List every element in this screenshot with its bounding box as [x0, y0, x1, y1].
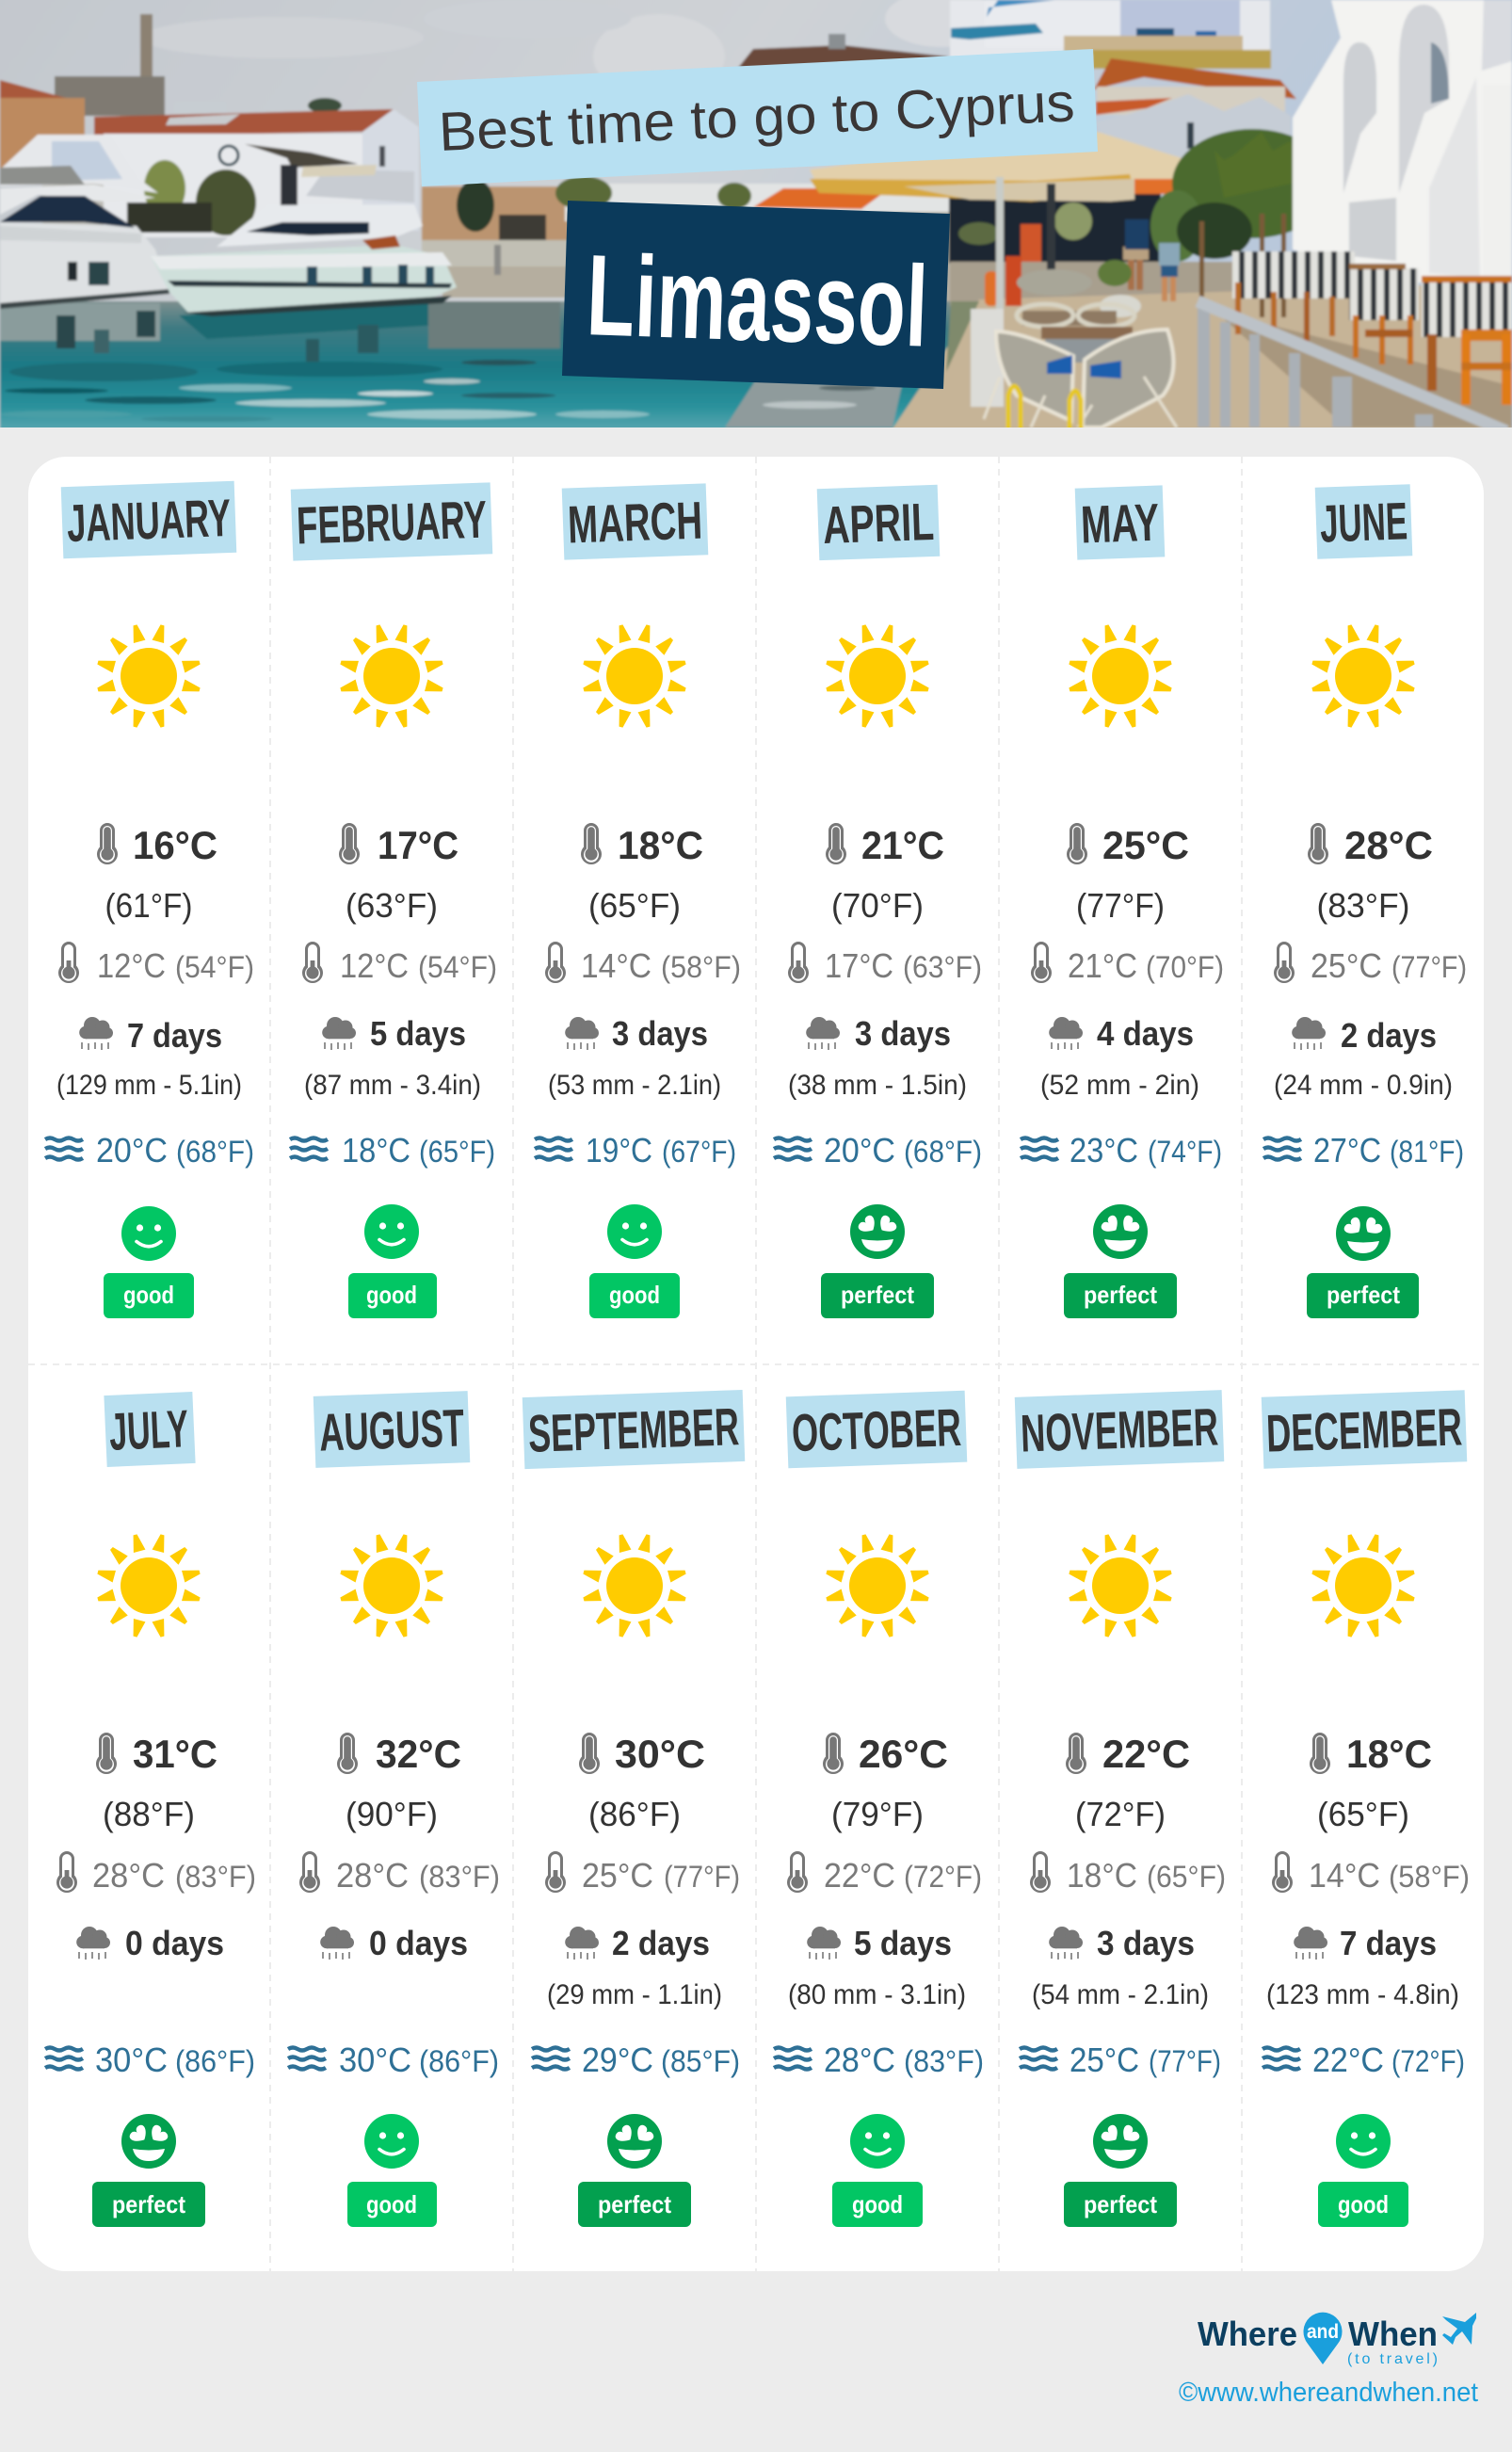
- month heading: May: [1075, 485, 1165, 560]
- rainy days: 0 days: [369, 1924, 468, 1962]
- low temperature: (77°F): [664, 1860, 740, 1894]
- high temperature: 18°C: [618, 823, 703, 867]
- sea temperature: (86°F): [175, 2044, 255, 2078]
- low temperature: [58, 942, 254, 985]
- low temperature: (65°F): [1147, 1860, 1226, 1894]
- month heading: April: APRIL: [822, 492, 935, 555]
- logo: Where and When (to travel): Where: [1198, 2315, 1297, 2353]
- sea temperature: [45, 2041, 255, 2079]
- rating: good: good: [609, 1281, 660, 1309]
- rainfall amount: (123 mm - 4.8in): [1266, 1979, 1459, 2010]
- month heading: October: OCTOBER: [791, 1397, 962, 1462]
- low temperature: 17°C: [825, 946, 893, 985]
- rainfall amount: (53 mm - 2.1in): [548, 1070, 721, 1101]
- rating: perfect: perfect: [1084, 1281, 1157, 1309]
- low temperature: [1031, 942, 1224, 985]
- low temperature: (58°F): [661, 950, 741, 984]
- icon: sun: [1311, 1533, 1416, 1638]
- low temperature: [302, 942, 497, 985]
- sea temperature: [288, 2041, 499, 2079]
- rating: good: good: [123, 1281, 174, 1309]
- month heading: February: [291, 482, 492, 561]
- high temperature Fahrenheit: (63°F): [346, 886, 438, 925]
- rainy days: [76, 1924, 224, 1962]
- month heading: November: [1015, 1390, 1224, 1469]
- rainy days: 0 days: [125, 1924, 224, 1962]
- icon: map pin with "and": and: [1307, 2321, 1339, 2343]
- rainy days: 3 days: [612, 1014, 708, 1053]
- rainfall amount: (29 mm - 1.1in): [547, 1979, 722, 2010]
- rainy days: [1294, 1924, 1437, 1962]
- panel: monthly climate table: [28, 457, 1484, 2271]
- rating: perfect: [1307, 1206, 1419, 1318]
- sea temperature: (86°F): [419, 2044, 499, 2078]
- sea temperature: 30°C: [95, 2041, 168, 2079]
- rating: perfect: perfect: [598, 2190, 671, 2218]
- low temperature: (70°F): [1146, 950, 1224, 984]
- high temperature: 17°C: [378, 823, 458, 867]
- rating: good: good: [366, 1281, 417, 1309]
- column: September: [523, 1390, 745, 2227]
- icon: sun: [96, 623, 201, 729]
- low temperature: 12°C: [97, 946, 166, 985]
- sea temperature: (83°F): [904, 2044, 984, 2078]
- low temperature: 12°C: [340, 946, 409, 985]
- icon: sun: [1068, 623, 1173, 729]
- high temperature: 25°C: [1102, 823, 1189, 867]
- low temperature: 21°C: [1068, 946, 1137, 985]
- month heading: April: [817, 485, 940, 560]
- column: June: [1263, 484, 1467, 1318]
- low temperature: (54°F): [418, 950, 497, 984]
- column: May: [1021, 485, 1224, 1318]
- rating: good: [347, 2114, 437, 2227]
- icon: sun: [1068, 1533, 1173, 1638]
- rating: perfect: [1064, 2114, 1177, 2227]
- sea temperature: 19°C: [586, 1131, 652, 1170]
- rainy days: 5 days: [370, 1014, 466, 1053]
- title banner: Limassol: [562, 201, 950, 389]
- icon: sun: [339, 623, 444, 729]
- sea temperature: (85°F): [661, 2044, 740, 2078]
- rating: good: [104, 1206, 194, 1318]
- sea temperature: [1263, 2041, 1465, 2079]
- high temperature: 16°C: [133, 823, 217, 867]
- rating: perfect: perfect: [1084, 2190, 1157, 2218]
- month heading: January: JANUARY: [66, 488, 232, 553]
- column: November: [1015, 1390, 1226, 2227]
- rainfall amount: (24 mm - 0.9in): [1274, 1070, 1453, 1101]
- rainy days: 3 days: [855, 1014, 951, 1053]
- month heading: September: SEPTEMBER: [527, 1396, 740, 1463]
- icon: sun: [339, 1533, 444, 1638]
- low temperature: (83°F): [419, 1860, 500, 1894]
- column: December: [1262, 1390, 1470, 2227]
- low temperature: (77°F): [1391, 950, 1467, 984]
- low temperature: 14°C: [581, 946, 651, 985]
- icon: sun: [96, 1533, 201, 1638]
- month heading: July: [104, 1392, 196, 1467]
- low temperature: [1272, 1851, 1470, 1895]
- month heading: March: MARCH: [567, 491, 703, 554]
- sea temperature: 27°C: [1313, 1131, 1381, 1170]
- rainy days: 2 days: [1341, 1016, 1437, 1055]
- high temperature: 22°C: [1102, 1732, 1190, 1776]
- month heading: February: FEBRUARY: [296, 489, 488, 556]
- rainfall amount: (129 mm - 5.1in): [56, 1070, 242, 1101]
- sea temperature: [774, 2041, 984, 2079]
- column: July: [45, 1392, 256, 2227]
- low temperature: [787, 1851, 982, 1895]
- high temperature: [826, 823, 944, 867]
- rating: good: [832, 2114, 923, 2227]
- rainy days: [320, 1924, 468, 1962]
- low temperature: (54°F): [175, 950, 254, 984]
- logo: Where and When (to travel): (to travel): [1347, 2351, 1438, 2367]
- low temperature: (58°F): [1389, 1860, 1470, 1894]
- high temperature: 21°C: [861, 823, 944, 867]
- header photo: Limassol marina: [0, 0, 1512, 438]
- title banner: Best time to go to Cyprus: Best time to go to Cyprus: [438, 72, 1076, 163]
- sea temperature: (72°F): [1391, 2044, 1465, 2078]
- icon: airplane: [1442, 2313, 1476, 2345]
- column: April: [774, 485, 982, 1318]
- icon: sun: [582, 1533, 687, 1638]
- low temperature: (83°F): [175, 1860, 256, 1894]
- high temperature Fahrenheit: (79°F): [831, 1795, 924, 1833]
- month heading: September: [523, 1390, 745, 1469]
- column: August: [288, 1391, 500, 2227]
- rating: perfect: [578, 2114, 691, 2227]
- rating: perfect: perfect: [112, 2190, 185, 2218]
- sea temperature: (81°F): [1390, 1135, 1464, 1169]
- high temperature: [339, 823, 458, 867]
- column: February: [290, 482, 497, 1318]
- high temperature Fahrenheit: (77°F): [1076, 886, 1165, 925]
- website credit: ©www.whereandwhen.net: [1179, 2378, 1478, 2408]
- sea temperature: [45, 1131, 254, 1170]
- low temperature: 28°C: [336, 1856, 409, 1895]
- rainfall amount: (54 mm - 2.1in): [1032, 1979, 1209, 2010]
- high temperature: 26°C: [859, 1732, 948, 1776]
- rating: good: [589, 1204, 680, 1318]
- low temperature: [545, 1851, 740, 1895]
- low temperature: 18°C: [1067, 1856, 1137, 1895]
- month heading: August: [314, 1391, 470, 1468]
- sea temperature: 18°C: [342, 1131, 410, 1170]
- logo: Where and When (to travel): [1198, 2313, 1476, 2367]
- rainfall amount: (52 mm - 2in): [1040, 1070, 1199, 1101]
- sea temperature: 20°C: [824, 1131, 895, 1170]
- logo: Where and When (to travel): When: [1348, 2315, 1438, 2353]
- rainy days: 4 days: [1097, 1014, 1194, 1053]
- high temperature: [581, 823, 703, 867]
- rating: good: good: [366, 2190, 417, 2218]
- sea temperature: (65°F): [419, 1135, 495, 1169]
- rating: good: [1318, 2114, 1408, 2227]
- high temperature: [1310, 1732, 1432, 1776]
- icon: sun: [825, 1533, 930, 1638]
- sea temperature: [1263, 1131, 1464, 1170]
- icon: sun: [582, 623, 687, 729]
- rainy days: [806, 1014, 951, 1053]
- rainy days: 5 days: [854, 1924, 952, 1962]
- high temperature Fahrenheit: (72°F): [1075, 1795, 1166, 1833]
- title banner: Best time to go to Cyprus: [417, 49, 1098, 186]
- high temperature: [97, 823, 217, 867]
- low temperature: [788, 942, 982, 985]
- high temperature Fahrenheit: (70°F): [831, 886, 924, 925]
- rainfall amount: (87 mm - 3.4in): [304, 1070, 481, 1101]
- rating: perfect: perfect: [841, 1281, 914, 1309]
- column: October: [774, 1391, 984, 2227]
- sea temperature: 25°C: [1070, 2041, 1139, 2079]
- rainy days: 2 days: [612, 1924, 710, 1962]
- sea temperature: [1021, 1131, 1222, 1170]
- sea temperature: [290, 1131, 495, 1170]
- icon: sun: [1311, 623, 1416, 729]
- sea temperature: (74°F): [1148, 1135, 1222, 1169]
- rating: perfect: perfect: [1327, 1281, 1400, 1309]
- high temperature: [1067, 823, 1189, 867]
- icon: map pin with "and": [1303, 2313, 1343, 2364]
- icon: sun: [825, 623, 930, 729]
- high temperature Fahrenheit: (90°F): [346, 1795, 438, 1833]
- title banner: Limassol: Limassol: [585, 231, 930, 371]
- month heading: June: [1315, 484, 1412, 559]
- rating: perfect: [821, 1204, 934, 1318]
- low temperature: [1030, 1851, 1226, 1895]
- rating: good: [348, 1204, 437, 1318]
- sea temperature: (68°F): [904, 1135, 982, 1169]
- sea temperature: 30°C: [339, 2041, 411, 2079]
- rating: perfect: [1064, 1204, 1177, 1318]
- rainy days: [1049, 1014, 1194, 1053]
- month heading: June: JUNE: [1319, 491, 1408, 554]
- high temperature Fahrenheit: (88°F): [103, 1795, 195, 1833]
- rating: good: good: [1338, 2190, 1389, 2218]
- low temperature: (63°F): [903, 950, 982, 984]
- high temperature: 18°C: [1346, 1732, 1432, 1776]
- sea temperature: [532, 2041, 740, 2079]
- month heading: March: [562, 483, 708, 560]
- rainy days: 7 days: [1340, 1924, 1437, 1962]
- rainfall amount: (80 mm - 3.1in): [788, 1979, 966, 2010]
- high temperature Fahrenheit: (65°F): [588, 886, 681, 925]
- rainy days: [1049, 1924, 1195, 1962]
- low temperature: [299, 1851, 500, 1895]
- column: March: [535, 483, 741, 1318]
- rainy days: 7 days: [127, 1016, 222, 1055]
- low temperature: 28°C: [92, 1856, 165, 1895]
- month heading: August: AUGUST: [318, 1397, 465, 1462]
- rainy days: 3 days: [1097, 1924, 1195, 1962]
- high temperature: 31°C: [133, 1732, 217, 1776]
- low temperature: 25°C: [1311, 946, 1382, 985]
- sea temperature: [774, 1131, 982, 1170]
- rainy days: [79, 1016, 222, 1055]
- sea temperature: (68°F): [176, 1135, 254, 1169]
- high temperature Fahrenheit: (86°F): [588, 1795, 681, 1833]
- sea temperature: [535, 1131, 736, 1170]
- rainy days: [322, 1014, 466, 1053]
- rainfall amount: (38 mm - 1.5in): [788, 1070, 967, 1101]
- high temperature Fahrenheit: (83°F): [1316, 886, 1410, 925]
- sea temperature: 23°C: [1070, 1131, 1138, 1170]
- rainy days: [807, 1924, 952, 1962]
- sea temperature: 29°C: [582, 2041, 653, 2079]
- sea temperature: (77°F): [1149, 2044, 1221, 2078]
- low temperature: [545, 942, 741, 985]
- high temperature Fahrenheit: (65°F): [1317, 1795, 1409, 1833]
- month heading: January: [61, 481, 236, 558]
- sea temperature: [1020, 2041, 1221, 2079]
- month heading: October: [786, 1391, 967, 1468]
- month heading: May: MAY: [1080, 492, 1160, 554]
- high temperature: [337, 1732, 461, 1776]
- month heading: July: JULY: [108, 1398, 189, 1461]
- low temperature: 14°C: [1309, 1856, 1380, 1895]
- sea temperature: 20°C: [96, 1131, 168, 1170]
- sea temperature: 28°C: [824, 2041, 895, 2079]
- low temperature: 22°C: [824, 1856, 895, 1895]
- low temperature: (72°F): [904, 1860, 982, 1894]
- rating: perfect: [92, 2114, 205, 2227]
- month heading: November: NOVEMBER: [1020, 1396, 1219, 1463]
- high temperature: 28°C: [1344, 823, 1433, 867]
- sea temperature: (67°F): [662, 1135, 736, 1169]
- high temperature Fahrenheit: (61°F): [105, 886, 192, 925]
- rating: good: good: [852, 2190, 903, 2218]
- rainy days: [565, 1014, 708, 1053]
- rainy days: [565, 1924, 710, 1962]
- low temperature: [1274, 942, 1467, 985]
- low temperature: [56, 1851, 256, 1895]
- high temperature: 30°C: [615, 1732, 705, 1776]
- high temperature: [96, 1732, 217, 1776]
- low temperature: 25°C: [582, 1856, 653, 1895]
- high temperature: 32°C: [376, 1732, 461, 1776]
- rainy days: [1292, 1016, 1437, 1055]
- column: January: [45, 481, 254, 1318]
- sea temperature: 22°C: [1312, 2041, 1384, 2079]
